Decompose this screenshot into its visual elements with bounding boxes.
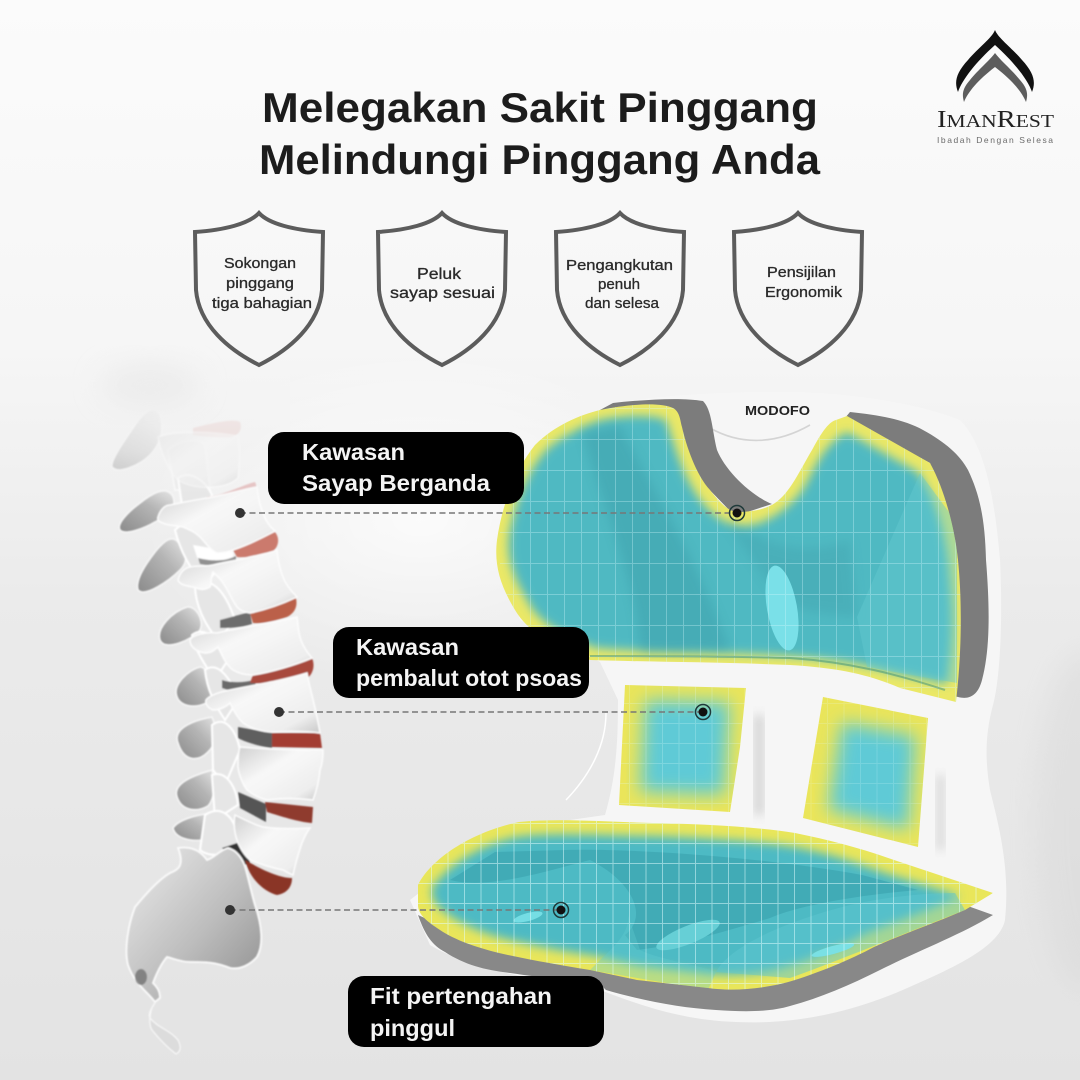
chair: grey seat rim xyxy=(418,905,993,1011)
callout: Kawasan Sayap Berganda: Kawasan xyxy=(302,439,405,465)
shield: Sokongan pinggang tiga bahagian xyxy=(195,213,323,365)
callout: Kawasan Sayap Berganda: Sayap Berganda xyxy=(302,470,491,496)
shield: Peluk sayap sesuai: sayap sesuai xyxy=(390,285,495,302)
shield: Pengangkutan penuh dan selesa: dan selesa xyxy=(585,296,660,312)
pad: left lumbar xyxy=(619,685,746,812)
discs xyxy=(193,421,322,895)
spine markers xyxy=(225,508,284,915)
title: Melegakan Sakit Pinggang xyxy=(262,84,818,131)
chair: grey upper rim xyxy=(600,399,989,698)
shield: Peluk sayap sesuai: Peluk xyxy=(417,266,461,283)
title xyxy=(259,84,821,183)
chair: white shell xyxy=(410,392,1006,1022)
vertebral bodies xyxy=(158,432,323,875)
shield: Sokongan pinggang tiga bahagian: tiga bahagian xyxy=(212,296,312,312)
callout: Fit pertengahan pinggul: pinggul xyxy=(370,1015,455,1041)
tagline: Ibadah Dengan Selesa xyxy=(937,135,1053,145)
connector lines xyxy=(230,513,737,910)
logo: ImanRest xyxy=(937,30,1054,145)
pad: seat xyxy=(415,815,995,995)
shield: Pensijilan Ergonomik xyxy=(734,213,862,365)
shield: Sokongan pinggang tiga bahagian: Sokongan xyxy=(224,256,296,272)
facet joints xyxy=(168,441,240,855)
wordmark: IMAN REST xyxy=(937,107,1054,133)
shield: Pengangkutan penuh dan selesa: penuh xyxy=(598,277,640,293)
pad: right lumbar xyxy=(800,695,930,850)
dark diagonal fold xyxy=(583,425,730,652)
callout: Kawasan pembalut otot psoas: pembalut otot psoas xyxy=(356,665,582,691)
pad: upper back wings xyxy=(496,400,970,710)
spine fade overlay xyxy=(90,363,290,505)
dark seat contours xyxy=(450,850,918,950)
shield: Pengangkutan penuh dan selesa xyxy=(556,213,684,365)
light oval xyxy=(766,566,798,650)
white wedges and dark wedges xyxy=(193,545,272,866)
spine illustration xyxy=(112,410,323,1054)
shield: Pensijilan Ergonomik: Pensijilan xyxy=(767,265,836,281)
shield: Sokongan pinggang tiga bahagian: pinggang xyxy=(226,276,294,292)
shield: Pengangkutan penuh dan selesa: Pengangkutan xyxy=(566,258,673,274)
callout: Kawasan pembalut otot psoas xyxy=(333,627,589,698)
shield: Pensijilan Ergonomik: Ergonomik xyxy=(765,285,843,301)
spinous processes xyxy=(112,410,215,840)
sacrum xyxy=(126,848,261,1002)
callout: Kawasan pembalut otot psoas: Kawasan xyxy=(356,634,459,660)
lighter side panel xyxy=(857,473,957,683)
icon: dome arcs xyxy=(956,30,1034,102)
callout: Kawasan Sayap Berganda xyxy=(268,432,524,504)
pad markers xyxy=(554,506,744,918)
brand text: MODOFO xyxy=(745,403,810,418)
shield: Peluk sayap sesuai xyxy=(378,213,506,365)
light seat ellipses xyxy=(514,912,542,922)
callout: Fit pertengahan pinggul: Fit pertengahan xyxy=(370,983,552,1009)
callout: Fit pertengahan pinggul xyxy=(348,976,604,1047)
title: Melindungi Pinggang Anda xyxy=(259,136,821,183)
